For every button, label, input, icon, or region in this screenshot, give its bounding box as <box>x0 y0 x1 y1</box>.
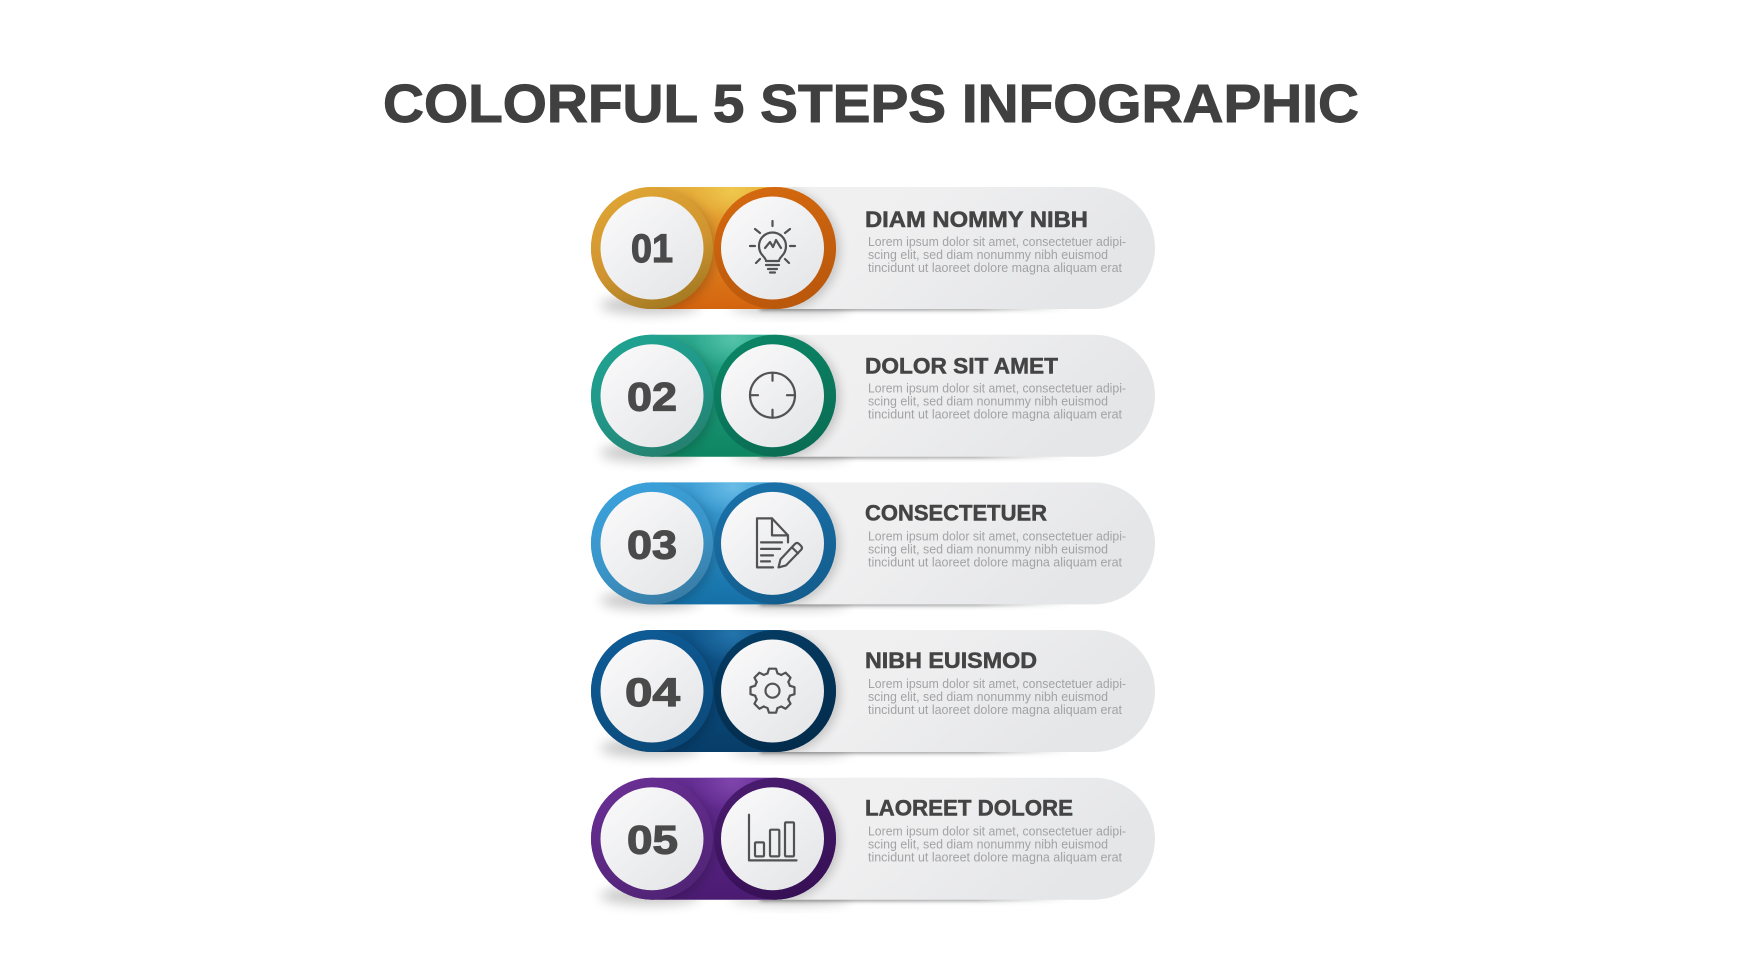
body text <box>868 382 1126 422</box>
grey text pill <box>591 482 1155 604</box>
heading: DIAM NOMMY NIBH <box>865 207 1088 232</box>
number circle <box>600 640 704 742</box>
body text: Lorem ipsum dolor sit amet, consectetuer adipi- <box>868 825 1126 839</box>
number circle: 03 <box>627 523 677 567</box>
body text: tincidunt ut laoreet dolore magna aliquam erat <box>868 703 1123 717</box>
colored badge <box>591 778 844 900</box>
number circle <box>600 787 704 890</box>
pill shadow <box>600 739 1070 757</box>
body text: Lorem ipsum dolor sit amet, consectetuer adipi- <box>868 235 1126 249</box>
body text: tincidunt ut laoreet dolore magna aliquam erat <box>868 555 1123 569</box>
body text <box>868 235 1126 275</box>
body text: tincidunt ut laoreet dolore magna aliquam erat <box>868 408 1123 422</box>
panel: step 2 <box>591 334 1155 468</box>
colored badge <box>591 630 844 752</box>
pill shadow <box>600 444 1070 462</box>
body text: Lorem ipsum dolor sit amet, consectetuer adipi- <box>868 529 1126 543</box>
colored badge <box>591 334 844 457</box>
number circle <box>600 492 704 595</box>
body text: scing elit, sed diam nonummy nibh euismod <box>868 248 1108 262</box>
icon circle: target <box>721 344 824 447</box>
body text: tincidunt ut laoreet dolore magna aliquam erat <box>868 851 1123 865</box>
number circle: 02 <box>627 376 677 420</box>
body text: scing elit, sed diam nonummy nibh euismod <box>868 395 1108 409</box>
pill shadow <box>600 591 1070 609</box>
icon circle: light bulb <box>721 196 824 300</box>
number circle: 04 <box>625 671 681 715</box>
colored badge <box>591 187 844 309</box>
icon circle: bar chart <box>721 787 824 890</box>
title: COLORFUL 5 STEPS INFOGRAPHIC <box>383 74 1359 134</box>
body text <box>868 529 1126 569</box>
icon circle: document with pencil <box>721 492 824 595</box>
heading: DOLOR SIT AMET <box>865 354 1059 379</box>
panel: step 5 <box>591 778 1155 910</box>
body text: Lorem ipsum dolor sit amet, consectetuer adipi- <box>868 677 1126 691</box>
number circle: 01 <box>631 227 673 271</box>
panel: step 1 <box>591 187 1155 320</box>
grey text pill <box>591 187 1155 309</box>
body text: scing elit, sed diam nonummy nibh euismod <box>868 690 1108 704</box>
body text: scing elit, sed diam nonummy nibh euismod <box>868 838 1108 852</box>
body text <box>868 677 1126 717</box>
number circle <box>600 344 704 447</box>
body text: Lorem ipsum dolor sit amet, consectetuer adipi- <box>868 382 1126 396</box>
body text: scing elit, sed diam nonummy nibh euismod <box>868 542 1108 556</box>
panel: step 4 <box>591 630 1155 763</box>
grey text pill <box>591 778 1155 900</box>
panel: step 3 <box>591 482 1155 616</box>
heading: NIBH EUISMOD <box>865 648 1037 673</box>
body text: tincidunt ut laoreet dolore magna aliquam erat <box>868 261 1123 275</box>
colored badge <box>591 482 844 604</box>
icon circle: gear <box>721 640 824 742</box>
heading: CONSECTETUER <box>865 500 1047 525</box>
number circle <box>600 196 704 300</box>
pill shadow <box>600 887 1070 905</box>
grey text pill <box>591 630 1155 752</box>
body text <box>868 825 1126 865</box>
grey text pill <box>591 335 1155 457</box>
number circle: 05 <box>627 819 678 863</box>
heading: LAOREET DOLORE <box>865 796 1073 821</box>
pill shadow <box>600 296 1070 314</box>
